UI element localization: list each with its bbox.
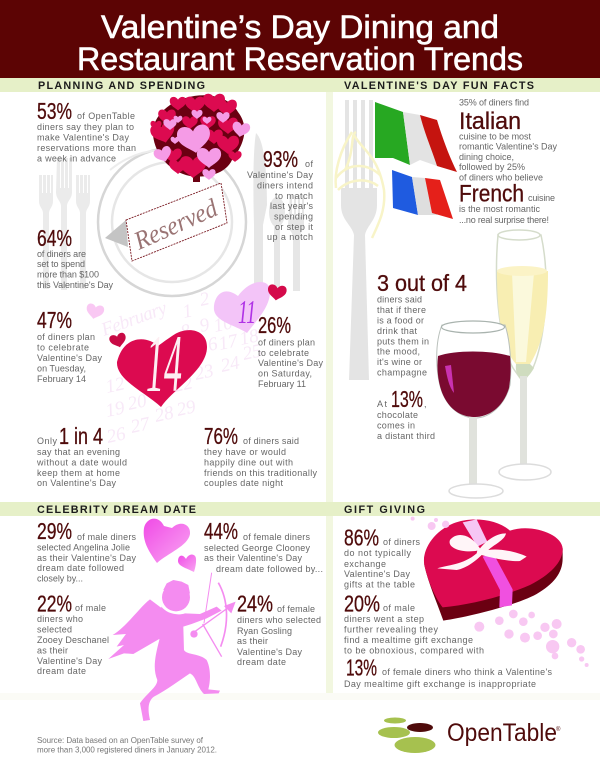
stat: 86 percent no gifts: Valentine's Day bbox=[344, 569, 410, 579]
stat: 24 percent Ryan Gosling: of female bbox=[277, 604, 315, 614]
stat: 76 percent with friends: friends on this traditionally bbox=[204, 468, 318, 478]
stat: 29 percent Angelina Jolie: selected Angelina Jolie bbox=[37, 542, 130, 552]
section heading: celebrity dream date bbox=[0, 502, 600, 516]
stat: 53 percent reservations: diners say they plan to bbox=[37, 122, 134, 132]
stat: 53 percent reservations: reservations more than bbox=[37, 143, 136, 153]
calendar background: 17 bbox=[217, 330, 241, 355]
source note: Source: Data based on an OpenTable survey of bbox=[37, 736, 204, 745]
calendar background: 22 bbox=[172, 372, 195, 397]
stat: 13 percent chocolate: comes in bbox=[377, 420, 415, 430]
stat: only 1 in 4 bbox=[36, 423, 127, 488]
stat: 64 percent over 100 dollars: this Valentine's Day bbox=[37, 280, 114, 290]
stat: 22 percent Zooey Deschanel: as their bbox=[37, 646, 68, 656]
stat: 29 percent Angelina Jolie: 29% bbox=[37, 518, 72, 544]
calendar background: 1 bbox=[181, 300, 194, 323]
stat: 47 percent on February 14: Valentine's Day bbox=[37, 353, 102, 363]
icon: champagne flute bbox=[497, 230, 551, 480]
icon: two floating hearts bbox=[144, 519, 196, 572]
stat: 44 percent George Clooney: selected George Clooney bbox=[204, 543, 310, 553]
stat: 47 percent on February 14: on Tuesday, bbox=[37, 364, 86, 374]
stat: 86 percent no gifts: exchange bbox=[344, 559, 386, 569]
stat: 20 percent obnoxious: of male bbox=[383, 603, 415, 613]
icon: pink heart with 11: 11 bbox=[238, 294, 256, 331]
icon: small pink heart bbox=[85, 303, 105, 321]
stat: 22 percent Zooey Deschanel: of male bbox=[75, 603, 106, 613]
stat: 47 percent on February 14: to celebrate bbox=[37, 342, 89, 352]
stat: 13 percent chocolate: At bbox=[377, 399, 387, 409]
calendar background: 20 bbox=[126, 390, 149, 415]
stat: 86 percent no gifts: gifts at the table bbox=[344, 580, 415, 590]
stat: only 1 in 4: on Valentine's Day bbox=[37, 478, 116, 488]
stat: only 1 in 4: without a date would bbox=[36, 458, 127, 468]
stat: 44 percent George Clooney: as their Valentine's Day bbox=[204, 553, 302, 563]
stat: 3 out of 4: it's wine or bbox=[377, 357, 422, 367]
stat: 93 percent spending: diners intend bbox=[257, 180, 313, 190]
stat: 13 percent chocolate: a distant third bbox=[377, 431, 435, 441]
stat: 26 percent on February 11: 26% bbox=[258, 312, 291, 338]
stat: 93 percent spending: to match bbox=[275, 191, 313, 201]
stat: 22 percent Zooey Deschanel: diners who bbox=[37, 614, 83, 624]
stat: 3 out of 4: drink that bbox=[377, 326, 417, 336]
icon: French flag bbox=[392, 170, 453, 219]
icon: reserved place card: Reserved bbox=[129, 193, 223, 256]
calendar background: 16 bbox=[197, 333, 220, 358]
stat: 26 percent on February 11: Valentine's Day bbox=[258, 358, 324, 368]
stat: 93 percent spending: spending bbox=[274, 212, 313, 222]
stat: 13 percent inappropriate: 13% bbox=[346, 654, 377, 680]
stat: Italian and French cuisine: 35% of diners find bbox=[459, 98, 529, 108]
stat: 3 out of 4: is a food or bbox=[377, 316, 424, 326]
title banner bbox=[0, 0, 600, 78]
stat: 53 percent reservations: make Valentine's Day bbox=[37, 132, 130, 142]
stat: 20 percent obnoxious bbox=[344, 590, 484, 656]
section heading: planning and spending bbox=[0, 78, 600, 92]
panel: gift giving bbox=[344, 504, 589, 689]
icon: three forks bbox=[39, 158, 90, 290]
stat: 13 percent inappropriate bbox=[344, 654, 552, 689]
icon: Italian flag bbox=[375, 102, 457, 172]
stat: 20 percent obnoxious: 20% bbox=[344, 590, 380, 616]
stat: 3 out of 4: the mood, bbox=[377, 346, 420, 356]
stat: 24 percent Ryan Gosling: diners who selected bbox=[237, 615, 321, 625]
calendar background: 24 bbox=[219, 352, 242, 377]
stat: 76 percent with friends: 76% bbox=[204, 423, 238, 449]
stat: only 1 in 4: 1 in 4 bbox=[59, 423, 103, 449]
stat: 24 percent Ryan Gosling bbox=[237, 590, 321, 667]
stat: 13 percent inappropriate: Day mealtime gift exchange is inappropriate bbox=[344, 679, 536, 689]
calendar background: 12 bbox=[104, 373, 127, 398]
stat: 24 percent Ryan Gosling: dream date bbox=[237, 657, 286, 667]
stat: 24 percent Ryan Gosling: Ryan Gosling bbox=[237, 626, 292, 636]
stat: 3 out of 4: that if there bbox=[377, 305, 426, 315]
stat: 53 percent reservations: a week in advance bbox=[37, 154, 116, 164]
stat: 22 percent Zooey Deschanel: 22% bbox=[37, 590, 72, 616]
calendar background: 29 bbox=[175, 396, 198, 421]
stat: 26 percent on February 11: on Saturday, bbox=[258, 368, 312, 378]
stat: 29 percent Angelina Jolie: dream date followed bbox=[37, 563, 124, 573]
stat: 86 percent no gifts: 86% bbox=[344, 524, 379, 550]
stat: 20 percent obnoxious: to be obnoxious, compared with bbox=[344, 646, 484, 656]
stat: 76 percent with friends: happily dine out with bbox=[204, 458, 293, 468]
stat: 64 percent over 100 dollars bbox=[37, 225, 114, 290]
calendar background: 18 bbox=[238, 325, 261, 350]
stat: 3 out of 4: 3 out of 4 bbox=[377, 270, 467, 296]
icon: large heart with 14: 14 bbox=[146, 318, 182, 409]
stat: Italian and French cuisine: dining choice, bbox=[459, 152, 514, 162]
stat: 86 percent no gifts: do not typically bbox=[344, 548, 412, 558]
stat: 76 percent with friends: of diners said bbox=[243, 436, 299, 446]
icon: heart bouquet bbox=[149, 94, 251, 182]
calendar background: 28 bbox=[153, 402, 176, 427]
icon: small red heart right bbox=[267, 284, 287, 302]
stat: Italian and French cuisine: French bbox=[459, 180, 524, 208]
stat: 13 percent chocolate: 13% bbox=[391, 386, 423, 412]
stat: 13 percent chocolate: , bbox=[424, 399, 427, 409]
section heading: gift giving: GIFT GIVING bbox=[344, 504, 425, 516]
stat: 47 percent on February 14: 47% bbox=[37, 307, 72, 333]
title bbox=[77, 9, 523, 77]
calendar background: February bbox=[98, 298, 170, 341]
stat: Italian and French cuisine bbox=[459, 98, 558, 225]
calendar background: 8 bbox=[179, 320, 193, 343]
stat: 44 percent George Clooney: 44% bbox=[204, 518, 238, 544]
icon: large heart with 14 bbox=[117, 318, 207, 409]
section heading: planning and spending: PLANNING AND SPENDING bbox=[38, 80, 205, 92]
stat: 13 percent chocolate: chocolate bbox=[377, 410, 418, 420]
stat: 64 percent over 100 dollars: 64% bbox=[37, 225, 72, 251]
stat: 3 out of 4: champagne bbox=[377, 368, 427, 378]
stat: 26 percent on February 11: February 11 bbox=[258, 379, 306, 389]
calendar background: 2 bbox=[198, 288, 212, 311]
stat: 29 percent Angelina Jolie bbox=[37, 518, 136, 584]
stat: 86 percent no gifts bbox=[344, 524, 420, 590]
stat: 44 percent George Clooney: dream date followed by... bbox=[216, 564, 323, 574]
icon: small red heart left bbox=[108, 332, 128, 349]
OpenTable logo bbox=[378, 718, 561, 753]
stat: 22 percent Zooey Deschanel bbox=[37, 590, 109, 676]
stat: 22 percent Zooey Deschanel: Valentine's Day bbox=[37, 656, 102, 666]
stat: 13 percent inappropriate: of female diners who think a Valentine's bbox=[382, 667, 552, 677]
stat: 93 percent spending: Valentine's Day bbox=[247, 170, 314, 180]
stat: 13 percent chocolate bbox=[377, 386, 435, 441]
stat: only 1 in 4: keep them at home bbox=[37, 468, 120, 478]
stat: 53 percent reservations: of OpenTable bbox=[77, 111, 135, 121]
icon: reserved place card bbox=[105, 183, 227, 261]
icon: pink heart with 11 bbox=[214, 282, 270, 333]
OpenTable logo: ® bbox=[556, 726, 561, 733]
panel: celebrity dream date bbox=[0, 502, 600, 721]
icon: dinner plate bbox=[98, 148, 246, 296]
calendar background: 9 bbox=[198, 314, 212, 337]
title: Restaurant Reservation Trends bbox=[77, 41, 523, 77]
panel: fun facts bbox=[336, 80, 558, 498]
stat: only 1 in 4: say that an evening bbox=[37, 447, 120, 457]
stat: 29 percent Angelina Jolie: as their Valentine's Day bbox=[37, 553, 136, 563]
source note bbox=[37, 736, 217, 754]
calendar background: 23 bbox=[193, 360, 216, 385]
stat: 26 percent on February 11: of diners plan bbox=[258, 338, 315, 348]
stat: 24 percent Ryan Gosling: as their bbox=[237, 636, 268, 646]
stat: 93 percent spending: or step it bbox=[275, 222, 313, 232]
stat: 93 percent spending bbox=[247, 146, 314, 242]
stat: 26 percent on February 11 bbox=[258, 312, 324, 389]
stat: 20 percent obnoxious: diners went a step bbox=[344, 614, 424, 624]
stat: 93 percent spending: last year's bbox=[270, 201, 314, 211]
stat: 64 percent over 100 dollars: more than $100 bbox=[37, 270, 99, 280]
stat: 76 percent with friends: they have or would bbox=[204, 447, 286, 457]
icon: cupid bbox=[108, 573, 236, 721]
stat: only 1 in 4: Only bbox=[37, 436, 58, 446]
stat: Italian and French cuisine: is the most romantic bbox=[459, 204, 540, 214]
icon: red wine glass bbox=[437, 321, 511, 498]
stat: 24 percent Ryan Gosling: Valentine's Day bbox=[237, 647, 302, 657]
stat: Italian and French cuisine: romantic Valentine's Day bbox=[459, 142, 558, 152]
section heading: celebrity dream date: CELEBRITY DREAM DATE bbox=[37, 504, 196, 516]
stat: 3 out of 4 bbox=[377, 270, 467, 378]
stat: 93 percent spending: of bbox=[305, 159, 313, 169]
stat: 29 percent Angelina Jolie: closely by... bbox=[37, 574, 83, 584]
stat: 29 percent Angelina Jolie: of male diners bbox=[77, 532, 136, 542]
icon: fork with spaghetti bbox=[336, 100, 384, 380]
stat: 93 percent spending: 93% bbox=[263, 146, 298, 172]
stat: Italian and French cuisine: followed by 25% bbox=[459, 162, 525, 172]
stat: 64 percent over 100 dollars: set to spend bbox=[37, 259, 85, 269]
calendar background: 19 bbox=[104, 397, 127, 422]
source note: more than 3,000 registered diners in January 2012. bbox=[37, 746, 217, 754]
calendar background: 26 bbox=[105, 423, 128, 448]
stat: 24 percent Ryan Gosling: 24% bbox=[237, 590, 273, 616]
stat: Italian and French cuisine: ...no real surprise there! bbox=[459, 215, 549, 225]
icon: knife and spoon bbox=[253, 133, 304, 291]
stat: 22 percent Zooey Deschanel: Zooey Deschanel bbox=[37, 635, 109, 645]
stat: 22 percent Zooey Deschanel: dream date bbox=[37, 666, 86, 676]
stat: 76 percent with friends: couples date night bbox=[204, 478, 283, 488]
stat: 3 out of 4: diners said bbox=[377, 294, 422, 304]
stat: Italian and French cuisine: of diners who believe bbox=[459, 172, 543, 182]
stat: Italian and French cuisine: cuisine to be most bbox=[459, 132, 531, 142]
stat: 26 percent on February 11: to celebrate bbox=[258, 348, 309, 358]
stat: Italian and French cuisine: cuisine bbox=[528, 193, 555, 203]
stat: 76 percent with friends bbox=[204, 423, 318, 488]
calendar background bbox=[98, 288, 264, 448]
calendar background: 25 bbox=[241, 340, 264, 365]
stat: 53 percent reservations: 53% bbox=[37, 98, 72, 124]
stat: 20 percent obnoxious: find a mealtime gift exchange bbox=[344, 635, 473, 645]
stat: 86 percent no gifts: of diners bbox=[383, 537, 420, 547]
stat: 53 percent reservations bbox=[37, 98, 136, 164]
stat: 22 percent Zooey Deschanel: selected bbox=[37, 624, 72, 634]
stat: Italian and French cuisine: Italian bbox=[459, 108, 521, 135]
stat: 44 percent George Clooney bbox=[204, 518, 323, 574]
icon: heart gift box bbox=[411, 517, 589, 667]
stat: 3 out of 4: puts them in bbox=[377, 336, 429, 346]
calendar background: 27 bbox=[129, 413, 153, 438]
stat: 20 percent obnoxious: further revealing they bbox=[344, 624, 438, 634]
icon: logo discs bbox=[378, 718, 436, 753]
logo wordmark: OpenTable bbox=[447, 719, 557, 747]
stat: 47 percent on February 14 bbox=[37, 307, 102, 384]
stat: 47 percent on February 14: of diners plan bbox=[37, 332, 95, 342]
stat: 64 percent over 100 dollars: of diners are bbox=[37, 249, 86, 259]
title: Valentine’s Day Dining and bbox=[101, 9, 499, 45]
panel: planning and spending bbox=[0, 78, 600, 488]
stat: 47 percent on February 14: February 14 bbox=[37, 374, 86, 384]
stat: 44 percent George Clooney: of female diners bbox=[243, 532, 310, 542]
section heading: fun facts: VALENTINE'S DAY FUN FACTS bbox=[344, 80, 534, 92]
stat: 93 percent spending: up a notch bbox=[267, 232, 313, 242]
calendar background: 10 bbox=[212, 312, 235, 337]
